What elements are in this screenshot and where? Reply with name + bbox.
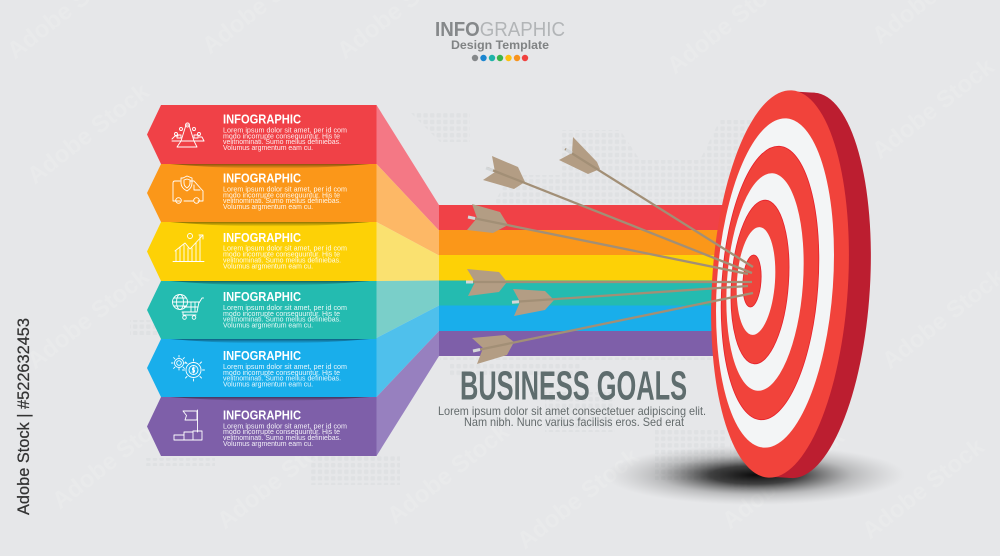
- arrow 1: [559, 137, 753, 267]
- description text: Nam nibh. Nunc varius facilisis eros. Sed erat: [464, 415, 685, 429]
- watermark: Adobe Stock: [857, 433, 990, 545]
- body text: Volumus argmentum eam cu.: [223, 143, 313, 152]
- body text: Lorem ipsum dolor sit amet, per id com: [223, 303, 347, 312]
- arrow 4: [466, 269, 752, 296]
- body text: Volumus argmentum eam cu.: [223, 262, 313, 270]
- heading: INFOGRAPHIC: [223, 112, 301, 126]
- body text: velitnominati. Sumo melius definiebas.: [223, 314, 341, 324]
- colour bands: [439, 205, 734, 356]
- icon: gears with dollar: [172, 356, 204, 381]
- body text: Lorem ipsum dolor sit amet, per id com: [223, 184, 347, 194]
- panel: purple: [147, 397, 376, 456]
- panel: teal: [147, 281, 376, 339]
- stock id vertical label: Adobe Stock | #522632453: [14, 318, 33, 515]
- watermark: Adobe Stock: [47, 403, 180, 515]
- body text: modo incorrupte consequuntur. His te: [223, 132, 340, 140]
- body text: [223, 184, 347, 211]
- heading: INFOGRAPHIC: [223, 408, 301, 422]
- icon: flag on steps: [174, 410, 202, 440]
- title block: [435, 18, 565, 61]
- watermark: Adobe Stock: [212, 423, 345, 535]
- body text: modo incorrupte consequuntur. His te: [223, 427, 340, 436]
- panel: red: [147, 105, 376, 164]
- heading: INFOGRAPHIC: [223, 349, 301, 363]
- world map dot pattern: [130, 112, 770, 490]
- body text: modo incorrupte consequuntur. His te: [223, 309, 340, 318]
- target rings: [706, 114, 844, 452]
- body text: Volumus argmentum eam cu.: [223, 202, 313, 211]
- arrow 5: [512, 286, 748, 316]
- subtitle: Design Template: [451, 40, 549, 52]
- body text: velitnominati. Sumo melius definiebas.: [223, 374, 341, 382]
- watermark: Adobe Stock: [717, 423, 850, 535]
- watermark: Adobe Stock: [867, 53, 1000, 165]
- body text: modo incorrupte consequuntur. His te: [223, 190, 340, 200]
- body text: modo incorrupte consequuntur. His te: [223, 250, 340, 258]
- body text: [223, 422, 347, 448]
- icon: globe and cart: [172, 294, 204, 319]
- panel: yellow: [147, 222, 376, 281]
- watermark: Adobe Stock: [22, 78, 155, 190]
- description text: [438, 404, 706, 429]
- arrow 6: [472, 293, 753, 364]
- body text: velitnominati. Sumo melius definiebas.: [223, 196, 341, 205]
- body text: [223, 244, 347, 270]
- body text: [223, 126, 347, 152]
- body text: Volumus argmentum eam cu.: [223, 320, 313, 330]
- body text: Lorem ipsum dolor sit amet, per id com: [223, 362, 347, 371]
- description text: Lorem ipsum dolor sit amet consectetuer adipiscing elit.: [438, 404, 706, 418]
- body text: Volumus argmentum eam cu.: [223, 439, 313, 448]
- colour dots: [472, 55, 528, 61]
- body text: velitnominati. Sumo melius definiebas.: [223, 137, 341, 146]
- body text: modo incorrupte consequuntur. His te: [223, 368, 340, 377]
- arrow 2: [483, 156, 752, 273]
- icon: growth chart: [173, 234, 204, 262]
- translucent connecting facets: [376, 105, 439, 456]
- icon: delivery van with shield: [173, 176, 203, 203]
- panel: blue: [147, 339, 376, 397]
- title: INFOGRAPHIC: [435, 18, 565, 41]
- body text: velitnominati. Sumo melius definiebas.: [223, 433, 341, 442]
- body text: Lorem ipsum dolor sit amet, per id com: [223, 244, 347, 252]
- heading: INFOGRAPHIC: [223, 231, 301, 245]
- target outer ring: [700, 86, 860, 482]
- target side wall: [724, 89, 882, 482]
- body text: [223, 362, 347, 388]
- arrow 3: [467, 204, 748, 274]
- target board: [700, 86, 882, 482]
- panel: orange: [147, 164, 376, 222]
- ground shadow: [605, 445, 905, 505]
- heading: INFOGRAPHIC: [223, 172, 301, 186]
- heading: business goals: BUSINESS GOALS: [460, 362, 687, 408]
- watermark: Adobe Stock: [22, 263, 155, 375]
- icon: team pyramid: [172, 123, 204, 147]
- body text: Lorem ipsum dolor sit amet, per id com: [223, 422, 347, 430]
- body text: Lorem ipsum dolor sit amet, per id com: [223, 126, 347, 134]
- watermark: Adobe Stock: [382, 418, 515, 530]
- body text: Volumus argmentum eam cu.: [223, 380, 313, 388]
- heading: INFOGRAPHIC: [223, 290, 301, 304]
- body text: velitnominati. Sumo melius definiebas.: [223, 256, 341, 264]
- watermark: Adobe Stock: [512, 443, 645, 555]
- body text: [223, 303, 347, 330]
